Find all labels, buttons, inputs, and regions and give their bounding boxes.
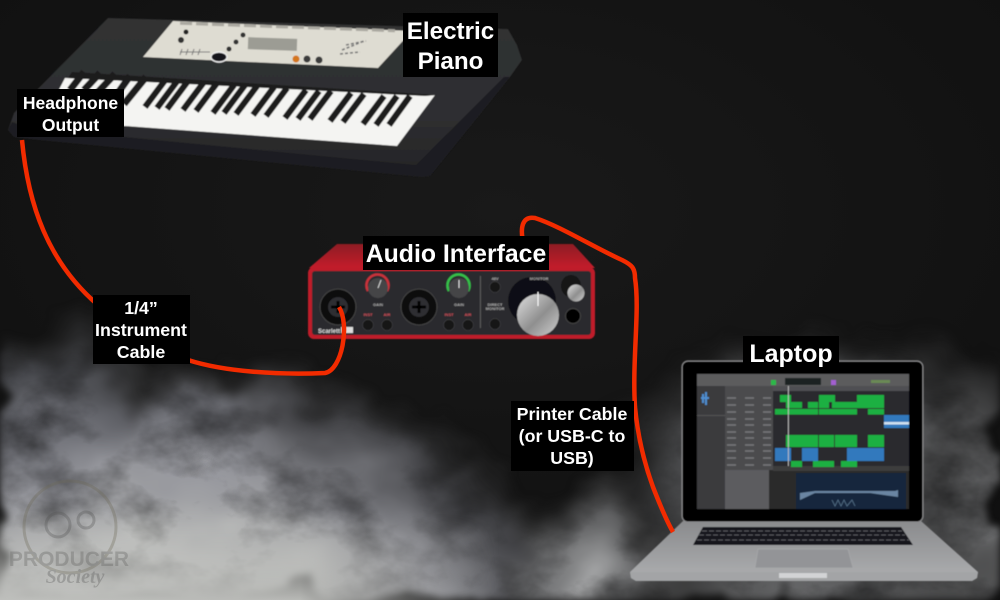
electric piano	[8, 18, 522, 177]
cable: instrument cable label to audio interface input	[188, 307, 344, 374]
green regions	[775, 395, 884, 467]
gain 1	[366, 274, 388, 298]
top face	[309, 244, 595, 268]
label: Printer Cable: Printer Cable	[517, 404, 627, 424]
control panel	[143, 21, 412, 68]
EQ display	[796, 473, 906, 509]
small panel labels: GAIN	[454, 302, 464, 307]
front panel	[312, 271, 591, 335]
label: Printer Cable	[511, 401, 634, 471]
small panel labels: INST	[444, 312, 454, 317]
keyboard body	[8, 18, 522, 177]
monitor knob	[508, 277, 559, 336]
smoke	[0, 300, 1000, 600]
small panel labels	[318, 276, 549, 335]
label: Printer Cable: (or USB-C to	[519, 426, 625, 446]
label: Headphone Output: Output	[42, 115, 99, 135]
small panel labels: Scarlett	[318, 329, 340, 335]
headphone jack	[566, 308, 580, 324]
label: 1/4 inch Instrument Cable: 1/4”	[124, 298, 158, 318]
watermark: Producer Society logo: Society	[46, 566, 105, 588]
small panel labels: 48V	[491, 276, 499, 281]
laptop base	[630, 521, 978, 581]
small panel labels: AIR	[465, 312, 472, 317]
label: Headphone Output: Headphone	[23, 93, 118, 113]
cable: audio interface to laptop	[522, 218, 673, 532]
small buttons	[362, 282, 500, 330]
label: Electric Piano: Piano	[418, 48, 483, 75]
label: Laptop: Laptop	[749, 340, 833, 368]
front frame	[308, 267, 595, 339]
label: Electric Piano: Electric	[407, 18, 494, 45]
cable: headphone output to instrument cable label	[22, 140, 98, 305]
label: Electric Piano	[403, 13, 498, 77]
audio interface	[308, 244, 595, 339]
watermark: Producer Society logo: PRODUCER	[9, 548, 129, 571]
small panel labels: AIR	[384, 312, 391, 317]
laptop screen bezel	[682, 361, 923, 522]
small panel labels: GAIN	[373, 302, 383, 307]
watermark: Producer Society logo	[9, 481, 129, 588]
gain 2	[448, 274, 470, 298]
white keys	[40, 78, 435, 146]
small panel labels: INST	[363, 312, 373, 317]
panel divider	[479, 276, 482, 328]
small panel labels: MONITOR	[530, 276, 549, 281]
playhead	[787, 386, 790, 466]
input 2	[401, 289, 437, 325]
key top shadow	[68, 72, 437, 96]
small panel labels: MONITOR	[486, 306, 505, 311]
label: 1/4 inch Instrument Cable	[93, 295, 190, 364]
label: Audio Interface: Audio Interface	[366, 241, 546, 268]
smoke: bottom floor	[0, 510, 500, 600]
small panel labels: DIRECT	[488, 302, 503, 307]
label: 1/4 inch Instrument Cable: Instrument	[95, 320, 187, 340]
label: Printer Cable: USB)	[550, 448, 594, 468]
input 1	[320, 289, 356, 325]
label: Headphone Output	[17, 89, 124, 137]
black keys	[70, 72, 410, 125]
headphone knob	[561, 275, 584, 302]
laptop	[630, 361, 978, 581]
label: 1/4 inch Instrument Cable: Cable	[117, 342, 165, 362]
screen display	[697, 374, 909, 509]
blue regions	[775, 415, 909, 461]
